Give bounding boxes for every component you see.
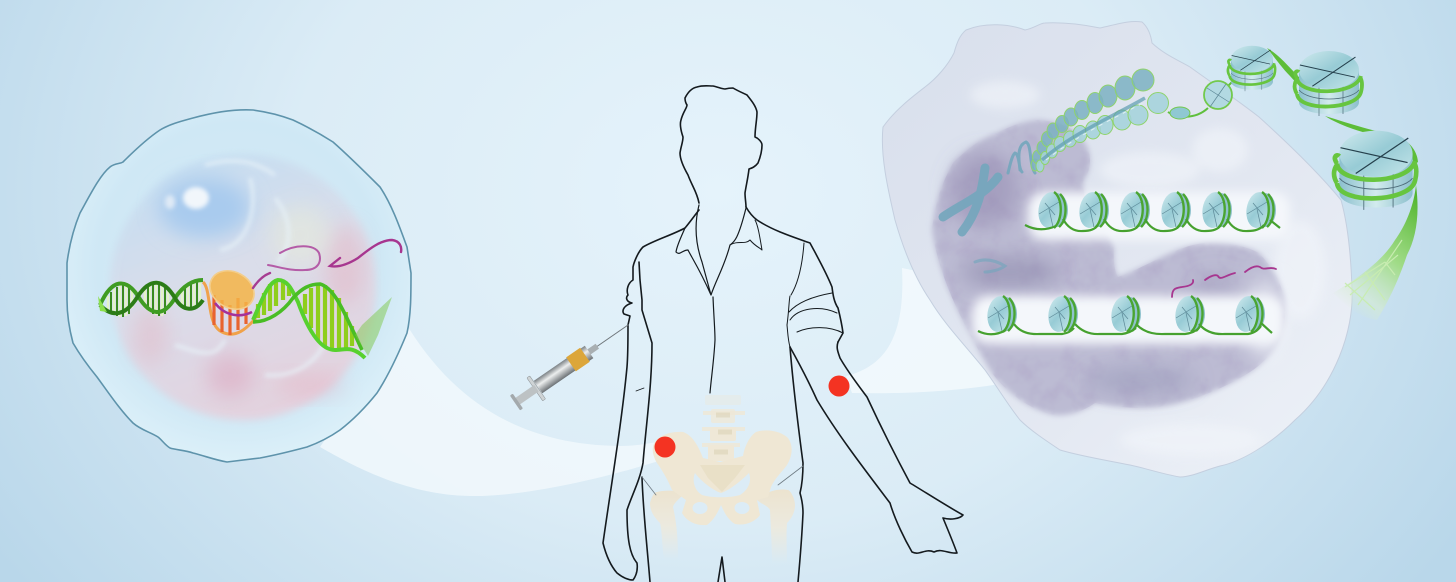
shirt placket [676,205,746,393]
panel: left cell [67,110,411,462]
left shoulder and arm [603,210,699,580]
obturator right [734,502,750,514]
collar right [730,220,762,250]
hip crease [642,466,803,495]
RNA fragments [1172,266,1276,297]
large nucleosome 1 [1228,46,1275,91]
femur left [650,491,684,560]
green DNA ribbon [1267,48,1418,165]
panel: right cell [882,21,1418,477]
large nucleosome 3 [1334,131,1416,210]
torso right side [790,347,803,582]
cell membrane [67,110,411,462]
central axis [1042,98,1145,160]
cell body [882,21,1352,477]
DNA helix: left segment [98,280,203,317]
nucleosome row 2 [978,295,1272,334]
obturator left [692,502,708,514]
nucleus texture [132,161,365,397]
chromatin fibre [1031,69,1168,172]
human outline [603,86,963,582]
sleeve cuff [787,243,843,347]
RNA strands [253,240,401,288]
inner legs [718,557,725,582]
light DNA bands [972,192,1290,344]
nucleus [932,120,1285,415]
injection site: hip [654,436,676,458]
injection site: arm [828,376,850,396]
wrist crease [636,388,644,391]
shoulders and right sleeve [746,207,843,342]
nucleus [110,154,376,420]
pelvis [653,430,792,525]
callout ribbon: arm to right cell [846,268,1010,393]
pelvic inlet [694,473,750,497]
upper coils [1031,69,1154,171]
raised arm [790,342,963,553]
large nucleosome 2 [1295,51,1362,116]
linker and open nucleosomes [1168,76,1238,119]
torso left side [642,477,650,582]
transcription bubble [203,263,261,335]
nucleosome row 1 [1025,191,1280,231]
callout ribbon: left cell to hip [320,322,668,496]
lower coils [1036,92,1168,172]
sacrum shading [700,465,745,492]
chromatin shading [950,152,1283,394]
head and neck [680,86,762,207]
chromosome [943,142,1035,272]
DNA fan [1333,185,1418,320]
syringe [507,313,637,415]
bones: pelvis and spine [650,395,795,564]
femur right [757,489,795,564]
DNA helix: right segment [253,280,392,358]
cytoplasm texture [970,81,1326,456]
spine [702,395,745,461]
